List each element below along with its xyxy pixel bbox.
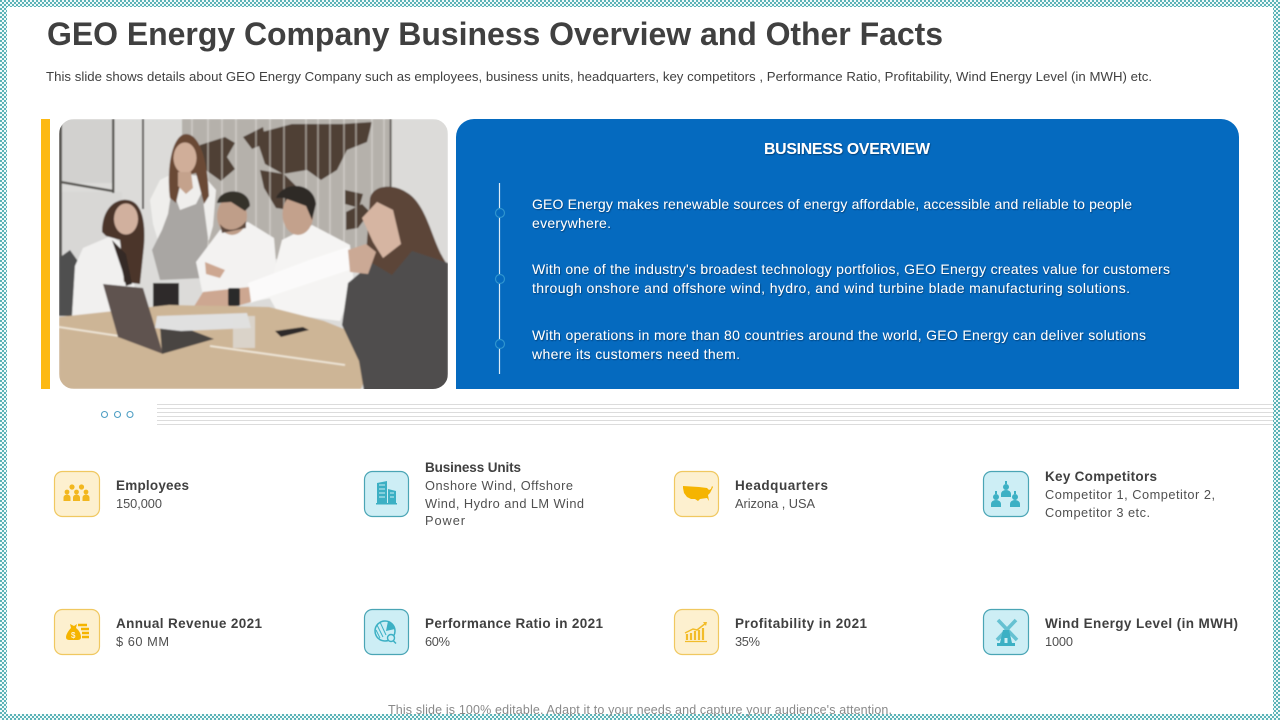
label: Key Competitors [1045, 469, 1157, 484]
icon: buildings [364, 472, 408, 516]
label: Annual Revenue 2021 [116, 616, 262, 631]
value: Arizona , USA [735, 496, 815, 511]
overview paragraph 3: With operations in more than 80 countries around the world, GEO Energy can deliver solutions [532, 327, 1146, 343]
label: Performance Ratio in 2021 [425, 616, 603, 631]
icon: money bag and coins [54, 610, 100, 654]
fact: annual revenue [54, 610, 262, 654]
panel: business overview [456, 119, 1239, 389]
overview paragraph 1: GEO Energy makes renewable sources of energy affordable, accessible and reliable to people [532, 196, 1132, 212]
papers [155, 313, 251, 331]
value [425, 478, 584, 528]
overview paragraph 3 [531, 327, 1146, 362]
fact: business units [364, 460, 584, 528]
fact: key competitors [984, 469, 1215, 520]
yellow accent bar [41, 119, 50, 389]
label: Profitability in 2021 [735, 616, 867, 631]
icon: people group [54, 472, 100, 516]
icon: USA map [674, 472, 718, 516]
icon: three competing teams [984, 472, 1028, 516]
footer note: This slide is 100% editable. Adapt it to your needs and capture your audience's attention. [388, 703, 892, 717]
laptop [103, 284, 163, 354]
table [59, 305, 379, 389]
man 1 [195, 222, 276, 300]
standing woman [150, 174, 216, 244]
label: Business Units [425, 460, 521, 475]
label: Employees [116, 478, 189, 493]
icon: rising bar chart [674, 610, 718, 654]
fact: wind energy level [984, 610, 1238, 654]
man 2 [268, 225, 354, 321]
overview paragraph 1: everywhere. [532, 215, 611, 231]
value: 60% [425, 634, 450, 649]
chair [59, 250, 80, 316]
value: 1000 [1045, 634, 1073, 649]
value: Competitor 3 etc. [1045, 505, 1150, 520]
title: GEO Energy Company Business Overview and Other Facts [47, 16, 943, 52]
icon: money bag and coins: $ [71, 631, 76, 640]
value: 150,000 [116, 496, 162, 511]
value: Competitor 1, Competitor 2, [1045, 487, 1215, 502]
value [1045, 487, 1215, 520]
label: Headquarters [735, 478, 828, 493]
phone [275, 327, 309, 337]
glass [233, 316, 255, 348]
value: Power [425, 513, 466, 528]
overview paragraph 3: where its customers need them. [531, 346, 740, 362]
fact: employees [54, 472, 189, 516]
overview paragraph 2 [532, 261, 1170, 296]
left woman [72, 236, 136, 318]
icon: windmill [984, 610, 1028, 654]
right woman [366, 186, 446, 276]
value: 35% [735, 634, 760, 649]
overview paragraph 2: With one of the industry's broadest technology portfolios, GEO Energy creates value for customers [532, 261, 1170, 277]
business overview heading: BUSINESS OVERVIEW [764, 141, 930, 158]
subtitle text: This slide shows details about GEO Energy Company such as employees, business units, headquarters, key competitors , Performance Ratio, Profitability, Wind Energy Level (in MWH) etc. [46, 69, 1152, 84]
icon: pie chart with magnifier [364, 610, 408, 654]
overview paragraph 1 [532, 196, 1132, 231]
value: Wind, Hydro and LM Wind [425, 496, 584, 511]
value: $ 60 MM [116, 634, 169, 649]
value: Onshore Wind, Offshore [425, 478, 573, 493]
three small pagination dots [102, 412, 133, 418]
fact: performance ratio [364, 610, 603, 654]
photo: team meeting around a table [59, 119, 448, 391]
label: Wind Energy Level (in MWH) [1045, 616, 1238, 631]
overview paragraph 2: through onshore and offshore wind, hydro, and wind turbine blade manufacturing solutions. [532, 280, 1130, 296]
fact: profitability [674, 610, 867, 654]
timeline with three nodes [496, 183, 504, 374]
fact: headquarters [674, 472, 828, 516]
